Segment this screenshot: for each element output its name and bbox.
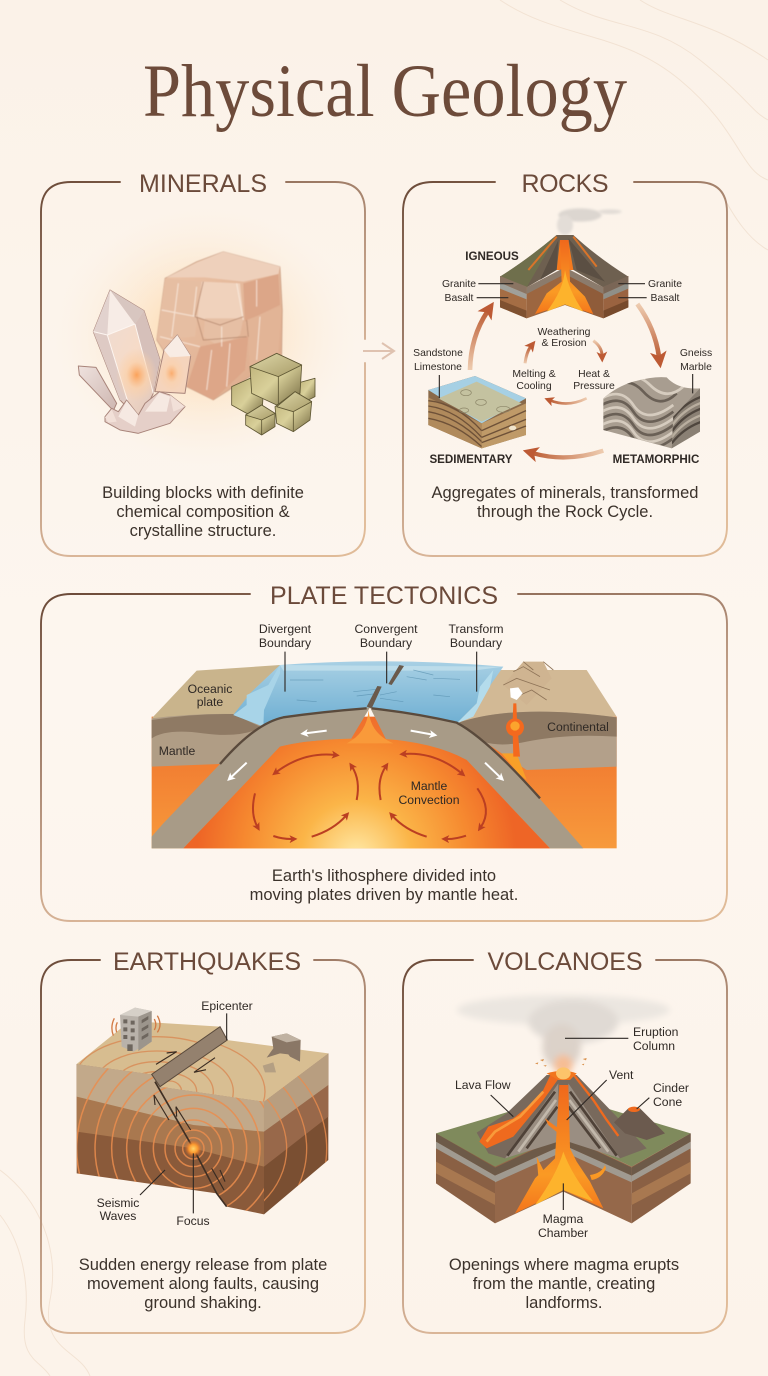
front waves bbox=[76, 1068, 264, 1211]
leader lines bbox=[140, 1013, 227, 1213]
block front face bbox=[77, 1064, 264, 1214]
icon: quartz crystals bbox=[78, 290, 191, 433]
title: Physical Geology bbox=[143, 50, 627, 133]
diagram: rock cycle: SEDIMENTARY bbox=[429, 453, 513, 466]
subducting plates bbox=[152, 707, 583, 848]
volcano cone bbox=[477, 1075, 647, 1158]
icon: pyrite cubes bbox=[232, 353, 315, 435]
heading: rocks: ROCKS bbox=[522, 170, 608, 198]
diagram: rock cycle: Sandstone bbox=[413, 348, 463, 359]
igneous volcano block bbox=[500, 208, 628, 318]
block top surfaces bbox=[77, 1021, 328, 1102]
description: volcanoes: from the mantle, creating bbox=[473, 1275, 655, 1293]
fault scarp bbox=[152, 1027, 227, 1087]
heading: minerals: MINERALS bbox=[139, 170, 267, 198]
metamorphic block bbox=[597, 377, 702, 450]
ejecta bbox=[535, 1058, 587, 1067]
diagram: rock cycle: Granite bbox=[442, 279, 476, 290]
side waves bbox=[264, 1076, 328, 1202]
description: plate tectonics: Earth's lithosphere divided into bbox=[272, 867, 496, 885]
diagram: volcano cross-section: Column bbox=[633, 1039, 675, 1053]
description: rocks: through the Rock Cycle. bbox=[477, 503, 653, 521]
leader lines bbox=[491, 1038, 649, 1210]
plate motion arrows bbox=[231, 731, 501, 778]
heading: volcanoes: VOLCANOES bbox=[488, 948, 642, 976]
leader lines bbox=[285, 652, 477, 692]
diagram: volcano cross-section: Magma bbox=[543, 1212, 584, 1226]
description: earthquakes: ground shaking. bbox=[144, 1294, 262, 1312]
diagram: rock cycle: METAMORPHIC bbox=[613, 453, 700, 466]
ridge magma bbox=[347, 710, 393, 743]
ground bbox=[436, 1108, 691, 1170]
diagram: plate boundaries cross-section: Mantle bbox=[411, 779, 448, 793]
diagram: volcano cross-section: Lava Flow bbox=[455, 1078, 511, 1092]
magma conduit and chamber bbox=[515, 1085, 606, 1213]
surface waves left bbox=[79, 1036, 198, 1074]
description: rocks: Aggregates of minerals, transformed bbox=[432, 484, 698, 502]
core magma bbox=[183, 738, 550, 848]
description: minerals: crystalline structure. bbox=[130, 522, 276, 540]
cycle arrows bbox=[470, 304, 659, 457]
diagram: volcano cross-section: Chamber bbox=[538, 1226, 588, 1240]
illustration: mineral specimens bbox=[55, 205, 355, 465]
heading: earthquakes: EARTHQUAKES bbox=[113, 948, 301, 976]
diagram: plate boundaries cross-section: Boundary bbox=[360, 636, 413, 650]
diagram: rock cycle bbox=[413, 208, 712, 466]
diagram: rock cycle: Weathering bbox=[538, 327, 591, 338]
block left face bbox=[436, 1133, 563, 1223]
diagram: plate boundaries cross-section: plate bbox=[197, 695, 223, 709]
description: earthquakes: Sudden energy release from plate bbox=[79, 1256, 327, 1274]
icon: feldspar block bbox=[157, 252, 282, 400]
description: volcanoes: landforms. bbox=[525, 1294, 603, 1312]
diagram: fault block: Focus bbox=[176, 1214, 210, 1228]
heading: plate tectonics: PLATE TECTONICS bbox=[270, 582, 498, 610]
diagram: fault block: Epicenter bbox=[201, 999, 253, 1013]
diagram: rock cycle: Marble bbox=[680, 362, 712, 373]
diagram: rock cycle: Heat & bbox=[578, 369, 610, 380]
diagram: plate boundaries cross-section: Boundary bbox=[450, 636, 503, 650]
icon: collapsed building bbox=[263, 1033, 301, 1072]
fault line bbox=[155, 1082, 227, 1207]
icon: shaking building bbox=[112, 1008, 160, 1052]
diagram: plate boundaries cross-section: Convection bbox=[399, 793, 459, 807]
diagram: fault block: Seismic bbox=[97, 1196, 139, 1210]
panel: earthquakes bbox=[41, 948, 365, 1333]
diagram: volcano cross-section: Vent bbox=[609, 1068, 634, 1082]
description: earthquakes: movement along faults, causing bbox=[87, 1275, 319, 1293]
diagram: volcano cross-section bbox=[436, 995, 691, 1240]
diagram: plate boundaries cross-section: Divergent bbox=[259, 622, 312, 636]
description: minerals: Building blocks with definite bbox=[102, 484, 304, 502]
diagram: plate boundaries cross-section: Continental bbox=[547, 720, 609, 734]
diagram: volcano cross-section: Cone bbox=[653, 1095, 682, 1109]
block right face bbox=[264, 1053, 328, 1214]
diagram: rock cycle: IGNEOUS bbox=[465, 250, 519, 263]
ridge fissure bbox=[367, 665, 404, 708]
ocean bbox=[233, 661, 503, 727]
diagram: plate boundaries cross-section: Convergent bbox=[354, 622, 418, 636]
motion arrows bbox=[154, 1052, 225, 1190]
diagram: plate boundaries cross-section: Boundary bbox=[259, 636, 312, 650]
leader lines bbox=[439, 284, 693, 398]
sedimentary block bbox=[428, 376, 526, 448]
diagram: volcano cross-section: Eruption bbox=[633, 1025, 678, 1039]
surface waves right bbox=[168, 1044, 266, 1102]
diagram: plate boundaries cross-section: Transform bbox=[448, 622, 504, 636]
diagram: rock cycle: Cooling bbox=[516, 381, 552, 392]
diagram: rock cycle: Granite bbox=[648, 279, 682, 290]
panel: rocks bbox=[403, 170, 727, 556]
diagram: rock cycle: Limestone bbox=[414, 362, 462, 373]
eruption cloud bbox=[457, 995, 670, 1075]
diagram: volcano cross-section: Cinder bbox=[653, 1081, 689, 1095]
convection arrows bbox=[253, 754, 486, 839]
diagram: rock cycle: Basalt bbox=[445, 293, 474, 304]
diagram: rock cycle: Basalt bbox=[651, 293, 680, 304]
diagram: plate boundaries cross-section: Oceanic bbox=[188, 682, 232, 696]
arrow: minerals to rocks bbox=[363, 343, 394, 359]
panel: volcanoes bbox=[403, 948, 727, 1333]
diagram: rock cycle: Melting & bbox=[512, 369, 556, 380]
description: volcanoes: Openings where magma erupts bbox=[449, 1256, 679, 1274]
cinder cone bbox=[614, 1107, 665, 1140]
panel: minerals bbox=[41, 170, 365, 556]
diagram: rock cycle: Gneiss bbox=[680, 348, 712, 359]
volcanic magma conduit bbox=[506, 687, 524, 757]
diagram: rock cycle: Pressure bbox=[573, 381, 615, 392]
diagram: rock cycle: & Erosion bbox=[541, 338, 587, 349]
focus bbox=[185, 1140, 202, 1157]
description: minerals: chemical composition & bbox=[116, 503, 290, 521]
land surfaces bbox=[152, 662, 617, 770]
diagram: plate boundaries cross-section: Mantle bbox=[159, 744, 196, 758]
lava flows bbox=[479, 1071, 618, 1148]
panel: plate tectonics bbox=[41, 582, 727, 921]
diagram: plate boundaries cross-section bbox=[152, 622, 617, 848]
block right face bbox=[563, 1133, 691, 1223]
description: plate tectonics: moving plates driven by mantle heat. bbox=[250, 886, 518, 904]
diagram: fault block: Waves bbox=[100, 1209, 136, 1223]
diagram: fault block bbox=[76, 1001, 328, 1225]
